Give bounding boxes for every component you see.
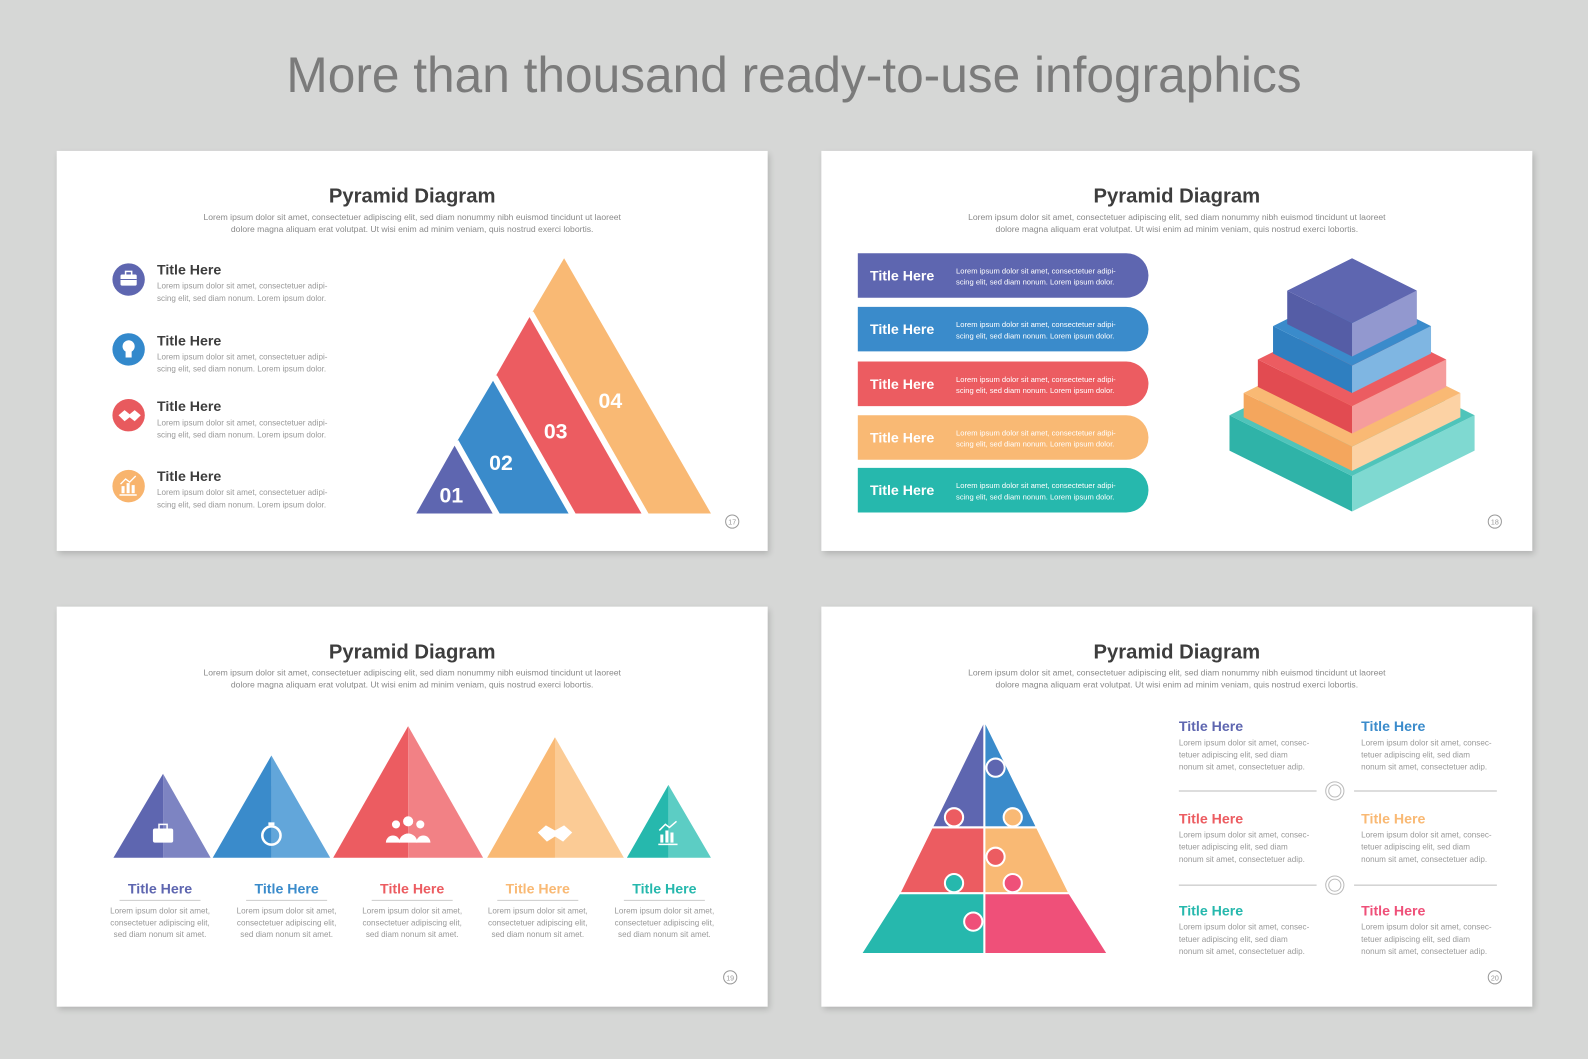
captions: Title Here — [380, 881, 444, 897]
captions: Lorem ipsum dolor sit amet, — [110, 907, 210, 916]
item 3: Lorem ipsum dolor sit amet, consectetuer adipi- — [157, 418, 328, 427]
panel: slide 19 five triangles — [57, 607, 768, 1007]
item 1: Title Here — [157, 262, 221, 278]
chart: striped triangle: 04 — [599, 389, 622, 413]
panel: slide 18 bars + isometric pyramid — [821, 151, 1532, 551]
subtitle: dolore magna aliquam erat volutpat. Ut wisi enim ad minim veniam, quis nostrud exerci lobortis. — [996, 224, 1358, 234]
bars list: Title Here — [870, 322, 934, 338]
main title: More than thousand ready-to-use infographics — [286, 49, 1302, 103]
page number — [1488, 515, 1501, 528]
bars list: Title Here — [870, 483, 934, 499]
text grid: Title Here — [1179, 719, 1243, 735]
text grid: Title Here — [1179, 811, 1243, 827]
chart: puzzle pyramid — [861, 720, 1108, 954]
heading: Pyramid Diagram — [329, 641, 495, 663]
item 1 — [112, 262, 328, 303]
captions: sed diam nonum sit amet. — [491, 930, 584, 939]
text grid — [1179, 719, 1492, 956]
page number: 20 — [1491, 974, 1499, 982]
subtitle — [203, 668, 622, 690]
subtitle: dolore magna aliquam erat volutpat. Ut wisi enim ad minim veniam, quis nostrud exerci lobortis. — [996, 680, 1358, 690]
captions: Title Here — [632, 881, 697, 897]
bars list: Title Here — [870, 431, 934, 447]
text grid: nonum sit amet, consectetuer adip. — [1361, 947, 1487, 956]
triangles — [113, 726, 711, 858]
captions: Title Here — [128, 881, 192, 897]
captions: Lorem ipsum dolor sit amet, — [362, 907, 462, 916]
chart: isometric stacked pyramid — [1229, 258, 1475, 511]
chart: striped triangle: 02 — [489, 451, 513, 475]
page number — [724, 971, 737, 984]
captions: consectetuer adipiscing elit, — [488, 919, 587, 928]
captions: Title Here — [254, 881, 319, 897]
captions: Lorem ipsum dolor sit amet, — [614, 907, 714, 916]
subtitle — [968, 212, 1386, 234]
captions: Lorem ipsum dolor sit amet, — [488, 907, 588, 916]
bars list: Lorem ipsum dolor sit amet, consectetuer adipi- — [956, 481, 1116, 490]
captions: sed diam nonum sit amet. — [618, 930, 711, 939]
text grid: nonum sit amet, consectetuer adip. — [1361, 763, 1487, 772]
bars list: Title Here — [870, 269, 934, 285]
text grid: Title Here — [1361, 719, 1426, 735]
item 4: Lorem ipsum dolor sit amet, consectetuer adipi- — [157, 488, 328, 497]
captions — [110, 881, 714, 939]
subtitle — [203, 212, 622, 234]
text grid: Lorem ipsum dolor sit amet, consec- — [1361, 923, 1492, 932]
bars list: scing elit, sed diam nonum. Lorem ipsum dolor. — [956, 278, 1114, 287]
text grid: Lorem ipsum dolor sit amet, consec- — [1179, 738, 1310, 747]
text grid: Lorem ipsum dolor sit amet, consec- — [1361, 831, 1492, 840]
subtitle: dolore magna aliquam erat volutpat. Ut wisi enim ad minim veniam, quis nostrud exerci lobortis. — [231, 680, 593, 690]
text grid: Title Here — [1361, 811, 1426, 827]
chart: striped triangle: 03 — [544, 420, 568, 444]
bars list: Title Here — [870, 377, 934, 393]
captions: Title Here — [506, 881, 570, 897]
item 2 — [112, 333, 328, 374]
bars list: Lorem ipsum dolor sit amet, consectetuer adipi- — [956, 375, 1116, 384]
text grid: nonum sit amet, consectetuer adip. — [1361, 855, 1487, 864]
page number: 19 — [726, 974, 734, 982]
bars list: Lorem ipsum dolor sit amet, consectetuer adipi- — [956, 320, 1116, 329]
item 1: scing elit, sed diam nonum. Lorem ipsum dolor. — [157, 294, 326, 303]
captions: consectetuer adipiscing elit, — [110, 919, 210, 928]
page number: 17 — [728, 519, 736, 527]
captions: consectetuer adipiscing elit, — [615, 919, 714, 928]
text grid: nonum sit amet, consectetuer adip. — [1179, 855, 1305, 864]
text grid: tetuer adipiscing elit, sed diam — [1361, 935, 1470, 944]
item 4 — [112, 469, 328, 509]
page number — [1488, 971, 1501, 984]
subtitle: Lorem ipsum dolor sit amet, consectetuer adipiscing elit, sed diam nonummy nibh euismod tincidunt ut laoreet — [968, 668, 1386, 678]
text grid: tetuer adipiscing elit, sed diam — [1179, 751, 1288, 760]
page number: 18 — [1491, 519, 1499, 527]
captions: consectetuer adipiscing elit, — [237, 919, 336, 928]
panel: slide 20 puzzle pyramid — [821, 607, 1532, 1007]
bars list: Lorem ipsum dolor sit amet, consectetuer adipi- — [956, 428, 1116, 437]
captions: sed diam nonum sit amet. — [114, 930, 206, 939]
chart: striped triangle: 01 — [440, 483, 463, 507]
subtitle: Lorem ipsum dolor sit amet, consectetuer adipiscing elit, sed diam nonummy nibh euismod tincidunt ut laoreet — [968, 212, 1386, 222]
text grid: Title Here — [1179, 904, 1243, 920]
text grid: tetuer adipiscing elit, sed diam — [1361, 843, 1470, 852]
heading: Pyramid Diagram — [1094, 641, 1260, 663]
captions: sed diam nonum sit amet. — [366, 930, 459, 939]
subtitle: Lorem ipsum dolor sit amet, consectetuer adipiscing elit, sed diam nonummy nibh euismod tincidunt ut laoreet — [203, 668, 622, 678]
item 4: scing elit, sed diam nonum. Lorem ipsum dolor. — [157, 500, 326, 509]
page number — [726, 515, 739, 528]
captions: Lorem ipsum dolor sit amet, — [237, 907, 337, 916]
bars list: scing elit, sed diam nonum. Lorem ipsum dolor. — [956, 331, 1114, 340]
item 2: Lorem ipsum dolor sit amet, consectetuer adipi- — [157, 353, 328, 362]
bars list: scing elit, sed diam nonum. Lorem ipsum dolor. — [956, 386, 1114, 395]
text grid: tetuer adipiscing elit, sed diam — [1361, 751, 1470, 760]
subtitle: dolore magna aliquam erat volutpat. Ut wisi enim ad minim veniam, quis nostrud exerci lobortis. — [231, 224, 593, 234]
captions: sed diam nonum sit amet. — [240, 930, 333, 939]
chart: striped triangle — [416, 258, 711, 515]
item 2: scing elit, sed diam nonum. Lorem ipsum dolor. — [157, 365, 326, 374]
item 4: Title Here — [157, 469, 221, 485]
bars list: Lorem ipsum dolor sit amet, consectetuer adipi- — [956, 266, 1116, 275]
heading: Pyramid Diagram — [1094, 186, 1260, 208]
text grid: Lorem ipsum dolor sit amet, consec- — [1179, 831, 1310, 840]
panel: slide 17 triangle stripes — [57, 151, 768, 551]
item 3: scing elit, sed diam nonum. Lorem ipsum dolor. — [157, 431, 326, 440]
item 3 — [112, 399, 328, 440]
separators — [1179, 782, 1497, 894]
item 3: Title Here — [157, 399, 221, 415]
text grid: Lorem ipsum dolor sit amet, consec- — [1361, 738, 1492, 747]
captions: consectetuer adipiscing elit, — [362, 919, 462, 928]
item 2: Title Here — [157, 333, 221, 349]
bars list: scing elit, sed diam nonum. Lorem ipsum dolor. — [956, 440, 1114, 449]
item 1: Lorem ipsum dolor sit amet, consectetuer adipi- — [157, 282, 328, 291]
text grid: tetuer adipiscing elit, sed diam — [1179, 843, 1288, 852]
subtitle — [968, 668, 1386, 690]
list items — [112, 262, 328, 509]
bars list — [858, 253, 1148, 512]
subtitle: Lorem ipsum dolor sit amet, consectetuer adipiscing elit, sed diam nonummy nibh euismod tincidunt ut laoreet — [203, 212, 622, 222]
text grid: Title Here — [1361, 904, 1426, 920]
heading: Pyramid Diagram — [329, 186, 495, 208]
text grid: Lorem ipsum dolor sit amet, consec- — [1179, 923, 1310, 932]
text grid: nonum sit amet, consectetuer adip. — [1179, 763, 1305, 772]
text grid: tetuer adipiscing elit, sed diam — [1179, 935, 1288, 944]
bars list: scing elit, sed diam nonum. Lorem ipsum dolor. — [956, 492, 1114, 501]
text grid: nonum sit amet, consectetuer adip. — [1179, 947, 1305, 956]
